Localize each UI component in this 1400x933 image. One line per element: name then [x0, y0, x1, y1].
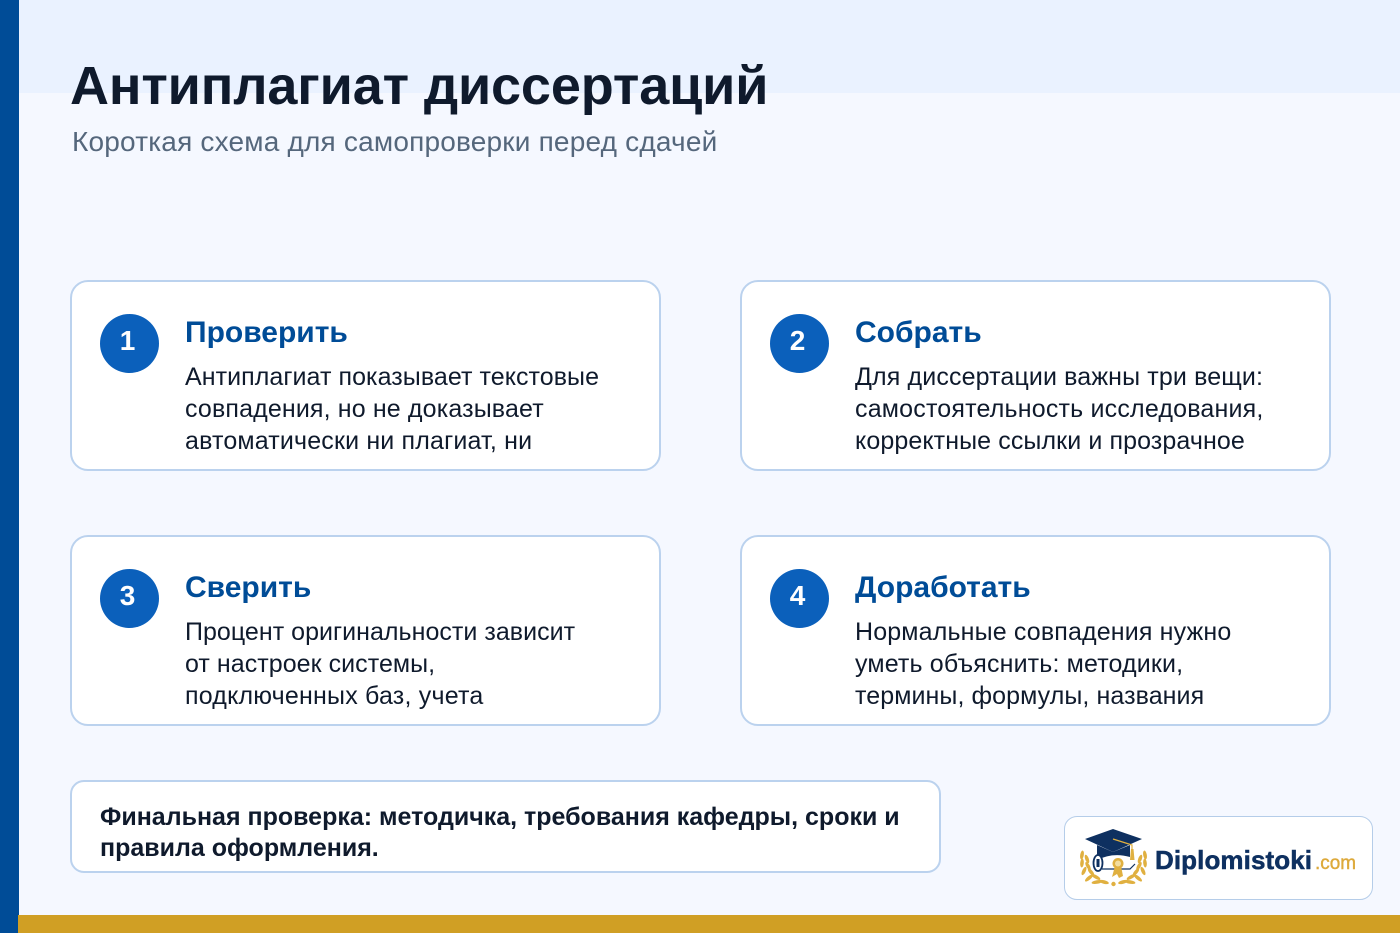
step 1 heading: Проверить — [185, 316, 348, 349]
logo wordmark: Diplomistoki — [1155, 845, 1312, 875]
final check text — [100, 803, 900, 862]
step 3 text: подключенных баз, учета — [185, 682, 483, 710]
panel: step 4 — [740, 535, 1331, 726]
panel: step 1 — [70, 280, 661, 471]
left accent bar — [0, 0, 19, 933]
panel: step 2 — [740, 280, 1331, 471]
step 4 number: 4 — [790, 580, 805, 611]
step 2 text: корректные ссылки и прозрачное — [855, 427, 1245, 455]
logo graphic — [1080, 829, 1356, 886]
step 4 text: термины, формулы, названия — [855, 682, 1204, 710]
icon: laurel wreath — [1079, 850, 1148, 886]
top band — [19, 0, 1400, 93]
step 2 heading: Собрать — [855, 316, 982, 349]
step 4 number — [770, 569, 829, 628]
step 4 text — [855, 618, 1231, 710]
step 3 text: Процент оригинальности зависит — [185, 618, 575, 646]
subtitle: Короткая схема для самопроверки перед сдачей — [72, 126, 717, 157]
step 1 text: Антиплагиат показывает текстовые — [185, 363, 599, 391]
step 3 text: от настроек системы, — [185, 650, 435, 678]
step 1 number — [100, 314, 159, 373]
panel: step 3 — [70, 535, 661, 726]
step 3 heading: Сверить — [185, 571, 311, 604]
step 2 text — [855, 363, 1264, 455]
step 4 heading: Доработать — [855, 571, 1031, 604]
bottom gold bar — [18, 915, 1400, 933]
icon: graduation cap — [1085, 829, 1142, 860]
step 1 text: автоматически ни плагиат, ни — [185, 427, 532, 455]
icon: diploma and seal — [1094, 855, 1135, 878]
title: Антиплагиат диссертаций — [70, 56, 768, 116]
step 2 number — [770, 314, 829, 373]
step 1 text — [185, 363, 599, 455]
panel: logo — [1064, 816, 1373, 900]
step 2 text: Для диссертации важны три вещи: — [855, 363, 1263, 391]
final check text: правила оформления. — [100, 834, 379, 862]
step 4 text: уметь объяснить: методики, — [855, 650, 1183, 678]
step 3 text — [185, 618, 575, 710]
panel: final check callout — [70, 780, 941, 873]
step 3 number: 3 — [120, 580, 135, 611]
step 4 text: Нормальные совпадения нужно — [855, 618, 1231, 646]
step 2 number: 2 — [790, 325, 805, 356]
step 1 text: совпадения, но не доказывает — [185, 395, 544, 423]
final check text: Финальная проверка: методичка, требования кафедры, сроки и — [100, 803, 900, 831]
step 1 number: 1 — [120, 325, 135, 356]
logo domain: .com — [1315, 853, 1356, 874]
step 2 text: самостоятельность исследования, — [855, 395, 1264, 423]
step 3 number — [100, 569, 159, 628]
